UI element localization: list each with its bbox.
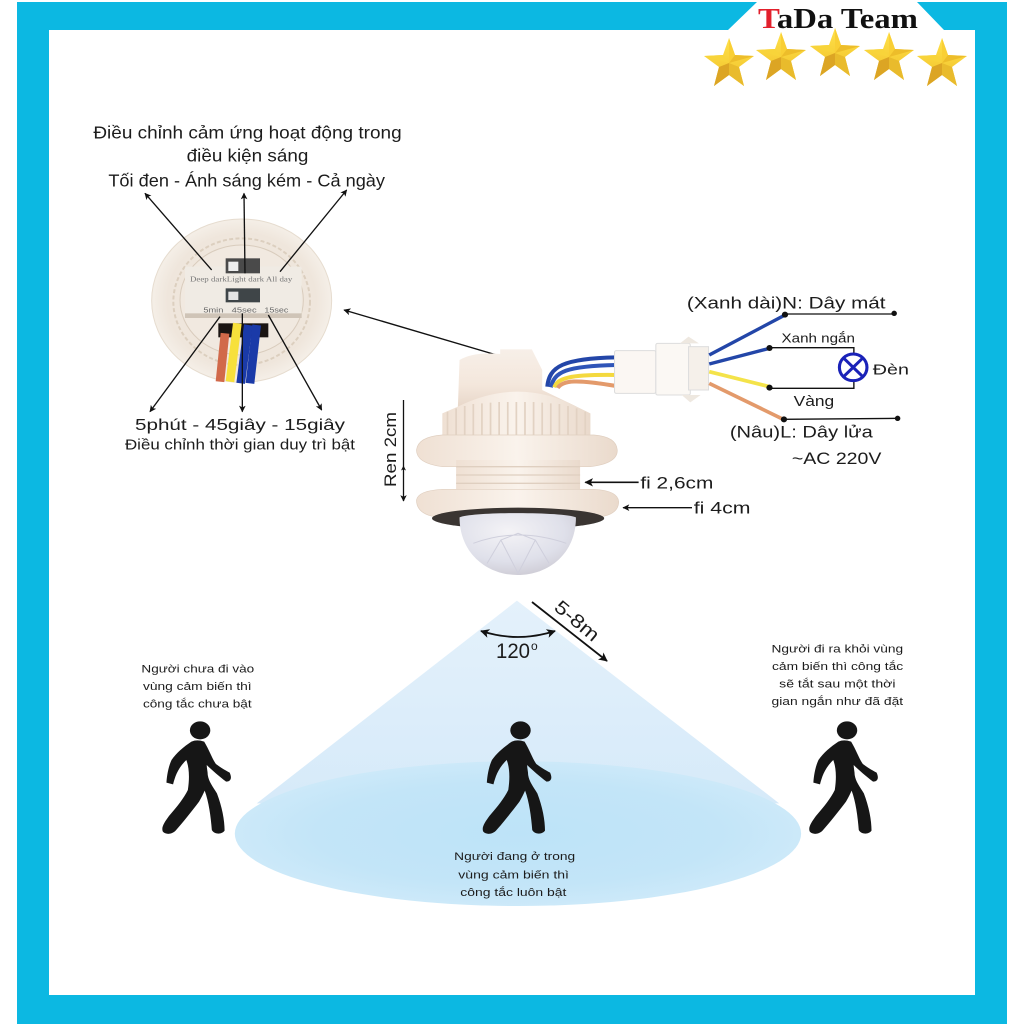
dimension: thread length: [381, 400, 404, 501]
sensor rear plate: [152, 219, 332, 382]
caption: inside zone: công tắc luôn bật: [460, 886, 566, 899]
icon: five gold stars: [704, 28, 967, 86]
wiring labels: (Xanh dài)N: Dây mát: [687, 294, 886, 312]
sensor rear housing: [458, 349, 577, 408]
panel: sensor photo and wiring: [416, 294, 909, 575]
person: inside zone: [483, 721, 551, 834]
arrow: from sensor to rear view: [344, 310, 500, 356]
dimension: thread length: Ren 2cm: [381, 412, 400, 487]
switch labels: Deep darkLight dark All day: [190, 275, 293, 284]
person: outside, before entering: [162, 721, 231, 834]
caption: after leaving: cảm biến thì công tắc: [772, 660, 903, 673]
thread body: [456, 460, 580, 493]
detection floor ellipse: [235, 761, 801, 906]
caption: inside zone: vùng cảm biến thì: [458, 869, 569, 882]
wiring labels: Vàng: [794, 394, 834, 410]
caption: before entering: công tắc chưa bật: [143, 697, 252, 710]
panel: rear view of sensor with adjustments: [93, 122, 402, 453]
heading: light condition adjustment: Tối đen - Ánh sáng kém - Cả ngày: [108, 171, 385, 191]
wires at rear: [218, 323, 268, 383]
wire connector: [615, 337, 709, 402]
switch labels: 5min: [203, 305, 223, 314]
caption: before entering: vùng cảm biến thì: [143, 681, 252, 693]
detection cone: [257, 601, 779, 803]
wiring labels: [687, 294, 909, 468]
angle: 120 degrees: o: [531, 639, 538, 653]
black rim: [432, 508, 604, 529]
switch labels: 15sec: [264, 305, 289, 314]
wires to connector: [547, 357, 616, 388]
switch module: [185, 258, 302, 318]
PIR dome lens: [460, 513, 576, 575]
dimension: flange diameter: [623, 499, 751, 517]
caption: inside zone: Người đang ở trong: [454, 851, 575, 863]
icon: lamp symbol: [839, 354, 867, 381]
dimension: thread diameter: [585, 474, 713, 492]
heading: light condition adjustment: Điều chỉnh cảm ứng hoạt động trong: [93, 122, 402, 142]
caption: after leaving: Người đi ra khỏi vùng: [772, 643, 903, 655]
caption: time adjustment: 5phút - 45giây - 15giây: [135, 417, 345, 434]
heading: light condition adjustment: điều kiện sáng: [187, 146, 308, 166]
range: 5-8m: 5-8m: [550, 597, 603, 646]
caption: after leaving: [772, 643, 903, 708]
wiring labels: Xanh ngắn: [782, 331, 855, 346]
angle: 120 degrees: [481, 631, 555, 663]
panel: detection zone: [141, 601, 903, 906]
caption: inside zone: [454, 851, 575, 899]
threaded collar: [442, 392, 590, 437]
caption: before entering: [141, 663, 254, 710]
caption: after leaving: gian ngắn như đã đặt: [772, 695, 903, 708]
wiring diagram: [709, 311, 900, 422]
switch labels: 45sec: [232, 305, 257, 314]
upper flange: [416, 435, 617, 467]
caption: time adjustment: Điều chỉnh thời gian duy trì bật: [125, 437, 355, 453]
dimension: flange diameter: fi 4cm: [694, 499, 751, 517]
angle: 120 degrees: 120: [496, 640, 530, 663]
wiring labels: ~AC 220V: [792, 449, 882, 468]
caption: before entering: Người chưa đi vào: [141, 663, 254, 675]
lower flange: [416, 489, 619, 517]
logo: TaDa Team: TaDa Team: [758, 3, 918, 35]
logo: TaDa Team: [728, 2, 944, 35]
range: 5-8m: [532, 597, 607, 661]
switch labels: [190, 275, 293, 314]
caption: time adjustment: [125, 417, 355, 453]
person: leaving zone: [809, 721, 878, 834]
wiring labels: (Nâu)L: Dây lửa: [730, 423, 873, 442]
caption: after leaving: sẽ tắt sau một thời: [779, 678, 896, 691]
dimension: thread diameter: fi 2,6cm: [640, 474, 713, 492]
heading: light condition adjustment: [93, 122, 402, 191]
arrows from switches: [145, 190, 347, 412]
wiring labels: Đèn: [873, 363, 909, 378]
